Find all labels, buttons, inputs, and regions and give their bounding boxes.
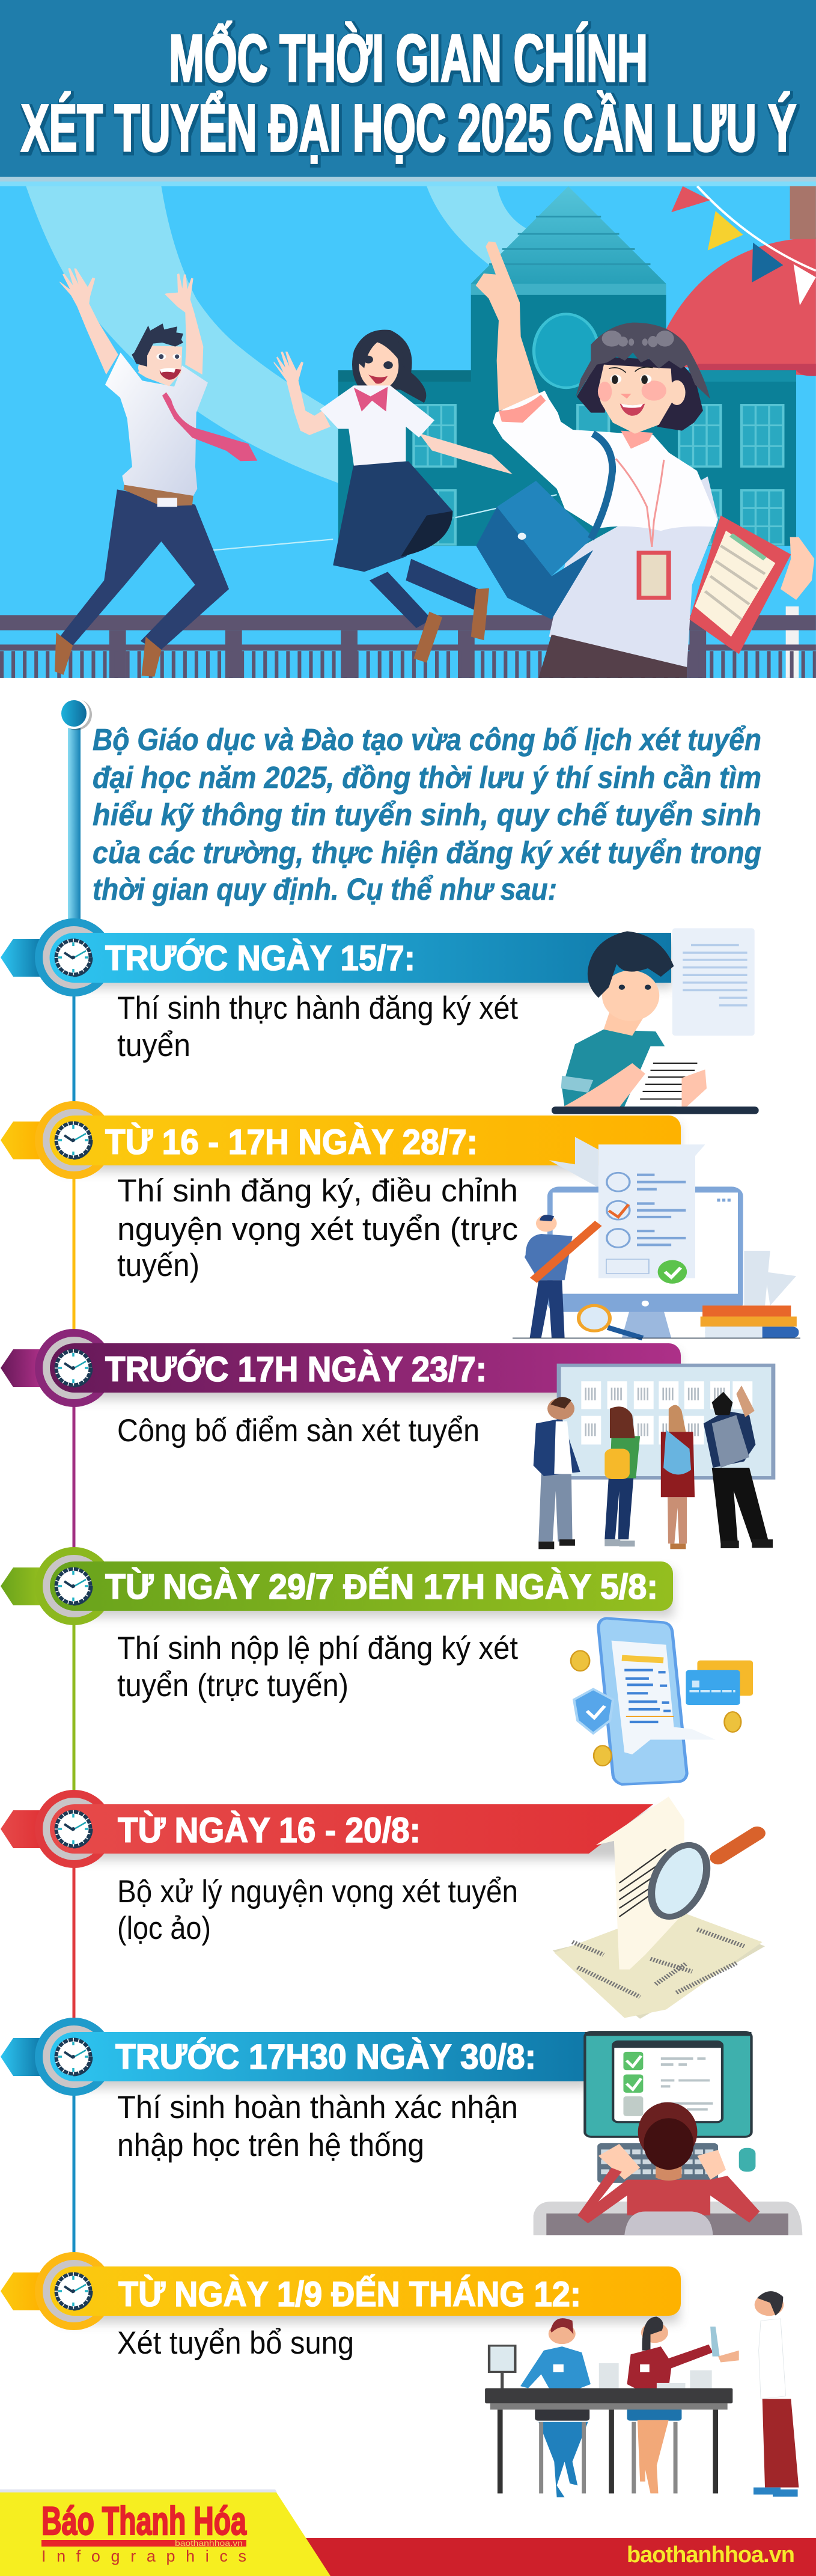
body 6 — [117, 2090, 518, 2163]
body 6: Thí sinh hoàn thành xác nhận — [117, 2090, 518, 2125]
illustration: payment on phone — [571, 1618, 753, 1784]
body 2 — [117, 1173, 518, 1283]
start dot — [58, 698, 92, 730]
intro text: Bộ Giáo dục và Đào tạo vừa công bố lịch xét tuyển — [93, 722, 761, 757]
body 5 — [117, 1874, 518, 1946]
illustration: students at notice board — [534, 1366, 773, 1549]
illustration: student writing — [552, 928, 759, 1114]
bunting flags — [671, 186, 816, 305]
intro text — [93, 722, 761, 906]
heading 6: TRƯỚC 17H30 NGÀY 30/8: — [115, 2037, 536, 2077]
girl student — [274, 330, 513, 663]
body 4 — [117, 1631, 518, 1703]
timeline rail — [58, 698, 92, 2257]
clerk two — [627, 2317, 720, 2494]
illustration: online form on monitor — [513, 1137, 800, 1338]
heading 3: TRƯỚC 17H NGÀY 23/7: — [105, 1350, 487, 1389]
logo: baothanhhoa.vn — [175, 2538, 243, 2548]
header banner — [0, 0, 816, 186]
milestone 2 — [1, 1101, 800, 1338]
intro text: thời gian quy định. Cụ thể như sau: — [93, 872, 557, 906]
heading 2: TỪ 16 - 17H NGÀY 28/7: — [105, 1123, 478, 1162]
clerk one — [520, 2318, 591, 2497]
student 2 — [604, 1406, 640, 1546]
heading 4: TỪ NGÀY 29/7 ĐẾN 17H NGÀY 5/8: — [105, 1567, 658, 1607]
student 3 — [661, 1405, 695, 1549]
heading 5: TỪ NGÀY 16 - 20/8: — [118, 1811, 421, 1850]
railing — [0, 606, 816, 678]
heading 7: TỪ NGÀY 1/9 ĐẾN THÁNG 12: — [118, 2275, 581, 2314]
body 4: tuyển (trực tuyến) — [117, 1668, 349, 1703]
footer — [0, 2489, 816, 2576]
body 2: tuyến) — [117, 1248, 199, 1283]
body 5: (lọc ảo) — [117, 1911, 211, 1946]
visitor — [718, 2291, 799, 2497]
school building — [338, 186, 816, 546]
logo — [41, 2498, 247, 2565]
milestone 5 — [1, 1790, 765, 2019]
body 5: Bộ xử lý nguyện vọng xét tuyển — [117, 1874, 518, 1909]
body 2: Thí sinh đăng ký, điều chỉnh — [117, 1173, 518, 1209]
logo: Infographics — [41, 2547, 246, 2565]
milestone 3 — [1, 1329, 773, 1549]
body 2: nguyện vọng xét tuyển (trực — [117, 1212, 518, 1247]
illustration: magnifier over papers — [553, 1796, 765, 2019]
milestone 7 — [1, 2252, 799, 2497]
intro text: của các trường, thực hiện đăng ký xét tuyển trong — [93, 835, 761, 870]
student 4 — [704, 1385, 773, 1548]
body 4: Thí sinh nộp lệ phí đăng ký xét — [117, 1631, 518, 1666]
heading 1: TRƯỚC NGÀY 15/7: — [105, 939, 415, 978]
illustration: admissions desk — [485, 2291, 799, 2497]
body 7: Xét tuyển bổ sung — [117, 2325, 354, 2361]
milestone 6 — [1, 2018, 802, 2235]
boy student — [55, 268, 257, 677]
teacher with clipboard — [476, 242, 814, 678]
milestone 4 — [1, 1547, 753, 1784]
body 1 — [117, 990, 518, 1063]
body 3: Công bố điểm sàn xét tuyển — [117, 1413, 480, 1448]
student 1 — [534, 1397, 580, 1549]
intro text: hiểu kỹ thông tin tuyển sinh, quy chế tuyển sinh — [93, 798, 761, 832]
hero illustration: students jumping — [0, 186, 816, 678]
website: baothanhhoa.vn — [627, 2542, 795, 2568]
illustration: person at computer — [534, 2032, 802, 2235]
title — [21, 22, 796, 165]
desk — [485, 2388, 732, 2494]
body 1: tuyển — [117, 1028, 190, 1063]
logo: Báo Thanh Hóa — [41, 2498, 247, 2543]
body 1: Thí sinh thực hành đăng ký xét — [117, 990, 518, 1026]
body 6: nhập học trên hệ thống — [117, 2128, 424, 2163]
intro text: đại học năm 2025, đồng thời lưu ý thí sinh cần tìm — [93, 760, 761, 795]
milestone 1 — [1, 918, 759, 1114]
